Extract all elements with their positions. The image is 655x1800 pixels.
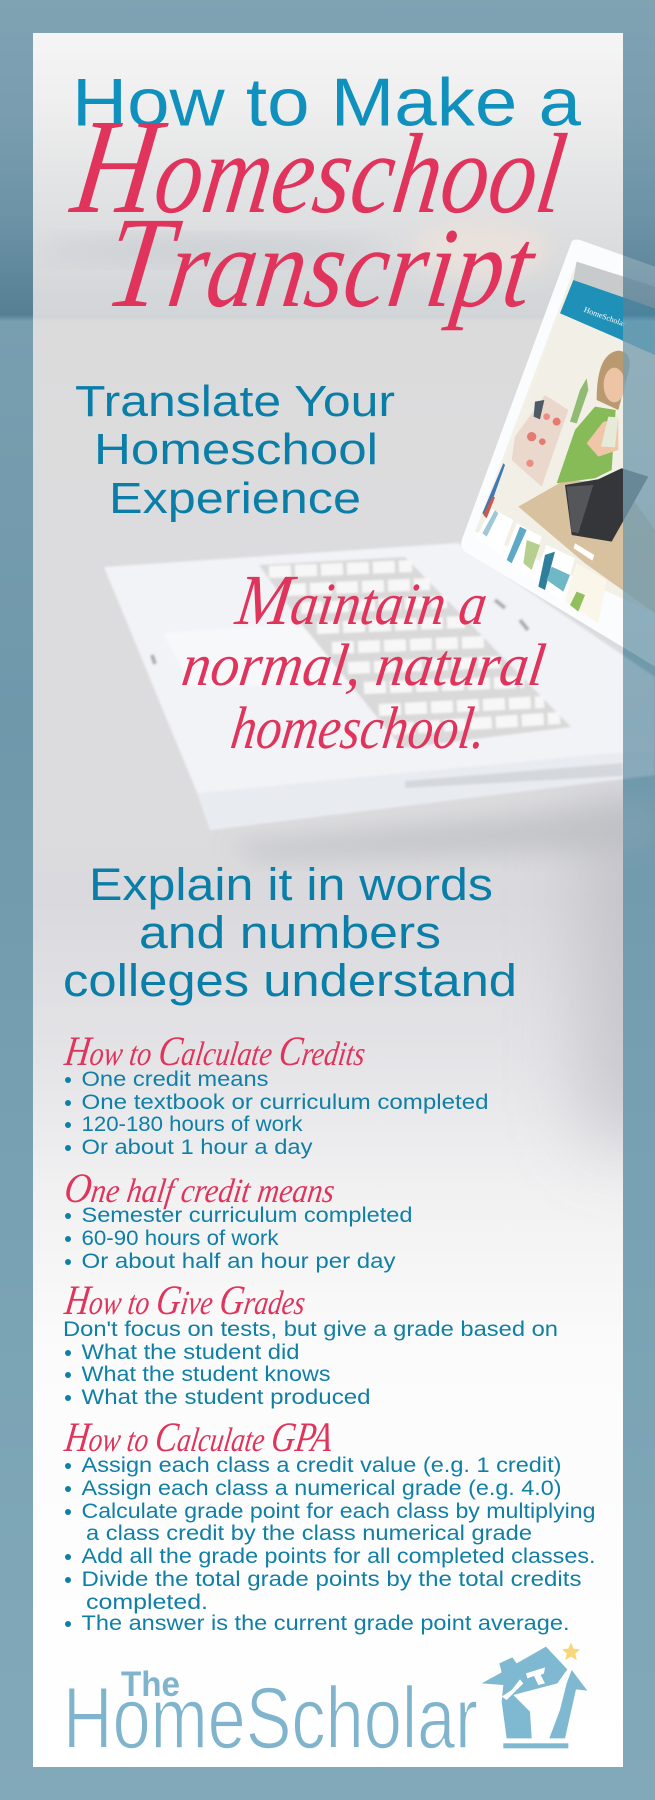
website thumbnail cards — [477, 463, 607, 623]
intro line: Don't focus on tests, but give a grade based on — [63, 1318, 558, 1341]
logo wordmark: HomeScholar — [63, 1670, 478, 1767]
logo icon: house — [482, 1643, 587, 1748]
title: How to Make a: How to Make a — [72, 64, 581, 140]
logo wordmark: The — [121, 1665, 180, 1704]
bullet list: Or about 1 hour a day — [82, 1136, 313, 1159]
bullet list: Semester curriculum completed — [82, 1204, 412, 1227]
bullet list: What the student knows — [82, 1363, 330, 1386]
subheading: One half credit means — [62, 1165, 338, 1212]
bullet list: Divide the total grade points by the total credits — [82, 1568, 582, 1591]
heading: Translate Your Homeschool Experience: Experience — [109, 474, 361, 523]
laptop photo — [104, 239, 655, 860]
subheading: How to Calculate Credits — [61, 1028, 369, 1075]
bullet list: a class credit by the class numerical grade — [86, 1522, 532, 1545]
subheading: How to Give Grades — [61, 1277, 309, 1324]
callout: Maintain a normal, natural homeschool. — [178, 560, 549, 762]
section: How to Calculate GPA — [61, 1414, 595, 1635]
heading: Explain it in words and numbers colleges understand — [63, 859, 517, 1006]
screen header logo: HomeScholar — [583, 305, 627, 329]
bullet list: Calculate grade point for each class by multiplying — [82, 1500, 596, 1523]
bullet list: 120-180 hours of work — [82, 1113, 303, 1136]
bullet list — [65, 1454, 596, 1635]
bullet list: Assign each class a numerical grade (e.g. 4.0) — [82, 1477, 562, 1500]
bullet list — [65, 1068, 488, 1159]
laptop screen — [461, 239, 655, 667]
screen photo — [475, 313, 655, 613]
heading: Translate Your Homeschool Experience — [75, 377, 395, 523]
bullet list: completed. — [86, 1591, 208, 1614]
bullet list: One credit means — [82, 1068, 268, 1091]
callout: Maintain a normal, natural homeschool.: Maintain a — [231, 560, 493, 640]
logo: The HomeScholar — [63, 1643, 587, 1767]
section: How to Give Grades — [61, 1277, 558, 1409]
heading: Translate Your Homeschool Experience: Translate Your — [75, 377, 395, 426]
right frame strip tint — [623, 0, 655, 1800]
bullet list: Add all the grade points for all completed classes. — [82, 1545, 596, 1568]
bullet list — [65, 1204, 412, 1273]
callout: Maintain a normal, natural homeschool.: homeschool. — [227, 695, 490, 762]
bullet list: One textbook or curriculum completed — [82, 1091, 488, 1114]
bullet list: The answer is the current grade point average. — [82, 1612, 570, 1635]
heading: Explain it in words and numbers colleges understand: and numbers — [139, 907, 441, 958]
bullet list: Assign each class a credit value (e.g. 1 credit) — [82, 1454, 562, 1477]
bullet list: What the student did — [82, 1341, 300, 1364]
title: Transcript: Transcript — [98, 192, 546, 335]
title: Homeschool: Homeschool — [63, 91, 576, 242]
bullet list: 60-90 hours of work — [82, 1227, 279, 1250]
bullet list: What the student produced — [82, 1386, 370, 1409]
heading: Explain it in words and numbers colleges understand: colleges understand — [63, 955, 517, 1006]
bullet list: Or about half an hour per day — [82, 1250, 396, 1273]
heading: Translate Your Homeschool Experience: Homeschool — [94, 425, 378, 474]
bullet list — [65, 1341, 370, 1409]
heading: Explain it in words and numbers colleges understand: Explain it in words — [89, 859, 493, 910]
callout: Maintain a normal, natural homeschool.: normal, natural — [178, 632, 549, 699]
laptop base — [104, 543, 655, 860]
subheading: How to Calculate GPA — [61, 1414, 336, 1461]
section: One half credit means — [62, 1165, 412, 1273]
section: How to Calculate Credits — [61, 1028, 488, 1159]
